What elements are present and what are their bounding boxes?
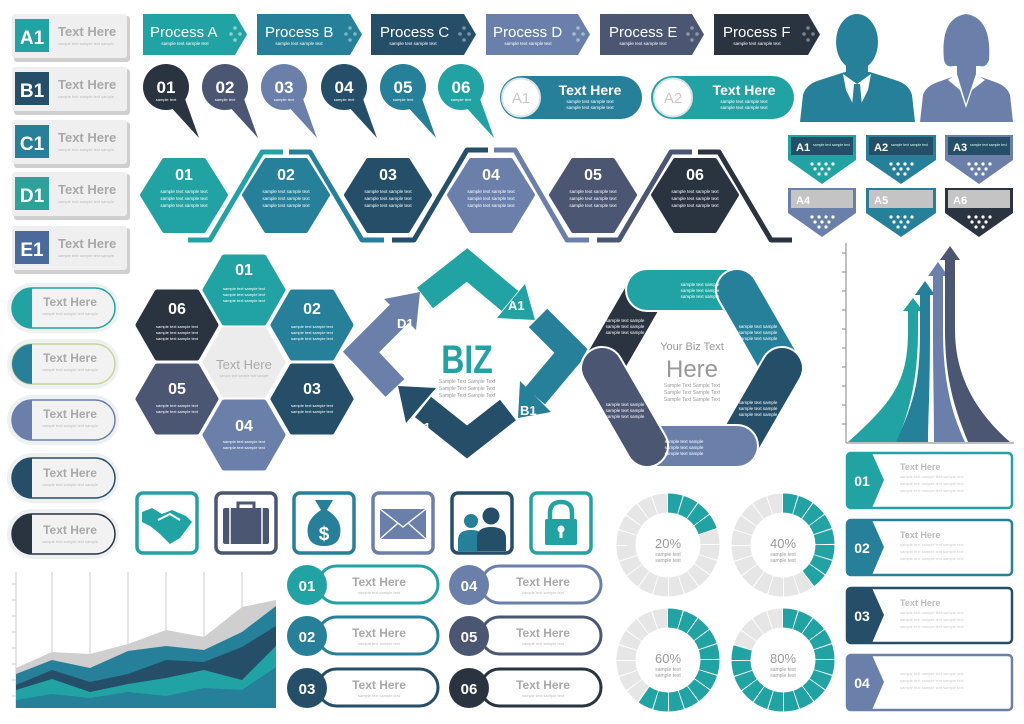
loop sample text: sample text sample <box>606 402 645 407</box>
loop center text <box>660 341 724 403</box>
loop sample text: sample text sample <box>606 330 645 335</box>
panel: A1/A2 pill tags <box>500 76 794 119</box>
tag A2: A2 <box>664 90 682 107</box>
hex 05: 05 <box>584 167 602 184</box>
pill 03: Text Here <box>352 678 406 692</box>
hex cluster 04: sample text sample text <box>223 445 266 450</box>
box 03: Text Here <box>900 598 940 608</box>
tag A1: sample text sample text <box>566 99 614 104</box>
arrow: D1: D1 <box>397 316 414 331</box>
card D1: sample text sample text sample <box>58 199 115 204</box>
pill 4: sample text sample text sample <box>42 482 99 487</box>
card B1: sample text sample text sample <box>58 94 115 99</box>
loop sample text: sample text sample <box>739 330 778 335</box>
shield A5: A5 <box>874 195 888 207</box>
icon: businessman <box>800 14 915 122</box>
box 04: sample text sample text sample text <box>900 671 964 676</box>
shield A4: A4 <box>796 195 811 207</box>
pill 02 <box>287 616 438 656</box>
donut 80% <box>741 618 825 702</box>
shield A1: sample text sample text <box>813 143 850 147</box>
box 04 <box>847 655 1012 710</box>
panel: left rounded pills <box>7 283 119 559</box>
hex cluster 02: sample text sample text <box>291 336 334 341</box>
process F <box>714 14 820 55</box>
pill 01: Text Here <box>352 575 406 589</box>
bubble 06: sample text <box>451 97 472 102</box>
hex 06: 06 <box>686 167 704 184</box>
hex cluster 05: sample text sample text <box>156 409 199 414</box>
hex 03: 03 <box>379 167 397 184</box>
pill 04: Text Here <box>516 575 570 589</box>
hex 06: sample text sample text <box>671 189 719 194</box>
hex cluster 03: 03 <box>303 381 321 398</box>
pill 02: Text Here <box>352 626 406 640</box>
hex cluster 03 <box>273 366 351 432</box>
bubble 05: 05 <box>394 78 412 97</box>
hex cluster 01: sample text sample text <box>223 286 266 291</box>
bubble 02 <box>202 64 258 138</box>
shield A2 <box>866 135 936 184</box>
box 02: Text Here <box>900 530 940 540</box>
process E: sample text sample text <box>619 41 667 46</box>
card A1: Text Here <box>58 24 116 39</box>
box 03: sample text sample text sample text <box>900 624 964 629</box>
hex cluster 04: sample text sample text <box>223 439 266 444</box>
card B1 <box>12 67 130 115</box>
process C <box>371 14 476 55</box>
pill 01: sample text sample text <box>358 590 401 595</box>
box 01: sample text sample text sample text <box>900 474 964 479</box>
loop sample text: sample text sample <box>606 318 645 323</box>
hex 03: sample text sample text <box>364 203 412 208</box>
box 03: 03 <box>854 608 870 624</box>
loop center text: Sample Text Sample Text <box>664 397 721 403</box>
pill 03: 03 <box>299 681 315 698</box>
loop sample text: sample text sample <box>739 412 778 417</box>
pill 1 <box>7 283 119 333</box>
donut 80%: 80% <box>770 651 796 666</box>
tag A2: Text Here <box>713 82 776 98</box>
loop center text: Your Biz Text <box>660 341 724 353</box>
pill 5 <box>7 509 119 559</box>
donut 20%: 20% <box>655 536 681 551</box>
shield A1: A1 <box>796 142 810 154</box>
hex 01: sample text sample text <box>160 196 208 201</box>
tag A2: sample text sample text <box>720 105 768 110</box>
bubble 05: sample text <box>393 97 414 102</box>
box 03 <box>847 588 1012 643</box>
icon: businesswoman <box>920 14 1013 122</box>
box 01 <box>847 453 1012 508</box>
card A1: sample text sample text sample <box>58 41 115 46</box>
arrow: A1 <box>425 265 535 320</box>
pill 06: sample text sample text <box>522 693 565 698</box>
shield A2: A2 <box>874 142 888 154</box>
hex cluster 04: 04 <box>235 418 253 435</box>
loop center text: Here <box>666 356 718 383</box>
donut 60%: sample text <box>655 667 681 673</box>
hex 05: sample text sample text <box>569 203 617 208</box>
loop sample text: sample text sample <box>739 324 778 329</box>
loop sample text: sample text sample <box>739 400 778 405</box>
box 01: 01 <box>854 473 870 489</box>
panel: left label cards A1-E1 <box>12 14 130 274</box>
process F: sample text sample text <box>733 41 781 46</box>
process B <box>257 14 362 55</box>
icon: briefcase <box>216 493 276 553</box>
panel: shield tags A1-A6 <box>788 135 1013 237</box>
hex cluster 06: sample text sample text <box>156 336 199 341</box>
hex cluster center: sample text sample text sample <box>219 374 269 378</box>
shield A6 <box>945 188 1013 237</box>
loop sample text: sample text sample <box>665 439 704 444</box>
panel: icon row <box>137 493 591 553</box>
box 02: sample text sample text sample text <box>900 549 964 554</box>
card E1: sample text sample text sample <box>58 253 115 258</box>
loop center text: Sample Text Sample Text <box>664 383 721 389</box>
donut 20% <box>626 503 710 587</box>
pill 5: Text Here <box>43 523 97 537</box>
text: BIZ <box>439 337 496 399</box>
box 02: 02 <box>854 540 870 556</box>
hex 06 <box>653 160 737 231</box>
process F: Process F <box>723 24 791 41</box>
arrow: C1: C1 <box>414 420 431 435</box>
box 04: 04 <box>854 675 870 691</box>
card C1: C1 <box>20 134 45 155</box>
text: BIZ: BIZ <box>441 337 493 382</box>
panel: numbered pills 01-06 <box>287 565 601 708</box>
process E: Process E <box>609 24 677 41</box>
card C1: sample text sample text sample <box>58 147 115 152</box>
hex 03: sample text sample text <box>364 196 412 201</box>
loop sample text: sample text sample <box>739 406 778 411</box>
hex 04 <box>449 160 533 231</box>
bubble 06: 06 <box>452 78 470 97</box>
loop sample text: sample text sample <box>681 282 720 287</box>
chart: rising arrows <box>842 243 1014 443</box>
bubble 06 <box>438 64 494 138</box>
process A: sample text sample text <box>161 41 209 46</box>
process D <box>486 14 590 55</box>
pill 06 <box>449 668 601 708</box>
process B: sample text sample text <box>275 41 323 46</box>
hex cluster 02: sample text sample text <box>291 330 334 335</box>
shield A3: sample text sample text <box>970 143 1007 147</box>
loop center text: Sample Text Sample Text <box>664 390 721 396</box>
box 02: sample text sample text sample text <box>900 556 964 561</box>
hex cluster 01: 01 <box>235 262 253 279</box>
donut 40%: sample text <box>770 552 796 558</box>
hex 04: sample text sample text <box>467 189 515 194</box>
bubble 02: sample text <box>215 97 236 102</box>
pill 05 <box>449 616 601 656</box>
pill 05: 05 <box>461 629 477 646</box>
bubble 05 <box>380 64 436 138</box>
pill 05: Text Here <box>516 626 570 640</box>
pill 01: 01 <box>299 578 315 595</box>
pill 4: Text Here <box>43 466 97 480</box>
hex 02 <box>244 160 328 231</box>
process E <box>600 14 704 55</box>
tag A2 <box>651 76 794 119</box>
hex cluster 06: sample text sample text <box>156 330 199 335</box>
hex cluster 01 <box>205 257 283 323</box>
hex cluster 02: sample text sample text <box>291 324 334 329</box>
donut 80%: sample text <box>770 673 796 679</box>
hex 01: 01 <box>175 167 193 184</box>
box 01: Text Here <box>900 462 940 472</box>
hex cluster center: Text Here <box>216 357 272 372</box>
pill 1: Text Here <box>43 295 97 309</box>
donut 80%: sample text <box>770 667 796 673</box>
loop sample text: sample text sample <box>606 408 645 413</box>
pill 4 <box>7 453 119 503</box>
card D1: D1 <box>20 186 45 207</box>
pill 04 <box>449 565 601 605</box>
bubble 01 <box>143 64 199 138</box>
arrow: B1: B1 <box>520 403 537 418</box>
box 03: sample text sample text sample text <box>900 610 964 615</box>
panel: hexagon cluster <box>138 257 351 468</box>
hex 04: sample text sample text <box>467 203 515 208</box>
process D: sample text sample text <box>504 41 552 46</box>
shield A4 <box>788 188 856 237</box>
donut 60%: sample text <box>655 673 681 679</box>
pill 01 <box>287 565 438 605</box>
panel: donut charts <box>626 503 825 702</box>
arrow: B1 <box>518 318 572 418</box>
card C1: Text Here <box>58 130 116 145</box>
donut 40% <box>741 503 825 587</box>
tag A1: sample text sample text <box>566 105 614 110</box>
panel: speech bubbles 01-06 <box>143 64 494 138</box>
hex cluster 02: 02 <box>303 301 321 318</box>
donut 20%: sample text <box>655 558 681 564</box>
shield A2: sample text sample text <box>891 143 928 147</box>
card E1: E1 <box>20 240 44 261</box>
pill 06: 06 <box>461 681 477 698</box>
bubble 04 <box>321 64 377 138</box>
hex 06: sample text sample text <box>671 196 719 201</box>
card C1 <box>12 120 130 168</box>
hex 05 <box>551 160 635 231</box>
panel: hexagonal loop <box>602 282 782 456</box>
card E1: Text Here <box>58 236 116 251</box>
hex 05: sample text sample text <box>569 196 617 201</box>
icon: envelope <box>373 493 433 553</box>
card B1: B1 <box>20 81 45 102</box>
panel: BIZ cycle arrows <box>361 265 572 442</box>
pill 06: Text Here <box>516 678 570 692</box>
bubble 03: 03 <box>275 78 293 97</box>
box 02 <box>847 520 1012 575</box>
pill 02: 02 <box>299 629 315 646</box>
loop sample text: sample text sample <box>665 451 704 456</box>
pill 3 <box>7 395 119 445</box>
hex 05: sample text sample text <box>569 189 617 194</box>
arrow: A1: A1 <box>508 298 525 313</box>
bubble 03 <box>261 64 317 138</box>
hex cluster 06: sample text sample text <box>156 324 199 329</box>
loop sample text: sample text sample <box>681 288 720 293</box>
bubble 04: sample text <box>334 97 355 102</box>
pill 3: Text Here <box>43 407 97 421</box>
process B: Process B <box>265 24 333 41</box>
card A1 <box>12 14 130 62</box>
tag A1: A1 <box>512 90 530 107</box>
pill 3: sample text sample text sample <box>42 423 99 428</box>
box 02: sample text sample text sample text <box>900 542 964 547</box>
hex 01: sample text sample text <box>160 189 208 194</box>
text: BIZ: Sample Text Sample Text <box>439 386 496 392</box>
hex cluster 06: 06 <box>168 301 186 318</box>
box 04: sample text sample text sample text <box>900 685 964 690</box>
icon: people <box>452 493 512 553</box>
loop sample text: sample text sample <box>606 324 645 329</box>
pill 05: sample text sample text <box>522 641 565 646</box>
loop sample text: sample text sample <box>606 414 645 419</box>
hex 02: sample text sample text <box>262 189 310 194</box>
process C: Process C <box>380 24 449 41</box>
hex cluster 05: 05 <box>168 381 186 398</box>
tag A2: sample text sample text <box>720 99 768 104</box>
icon: money bag <box>294 493 354 553</box>
hex cluster 04 <box>205 402 283 468</box>
hex cluster 05 <box>138 366 216 432</box>
card B1: Text Here <box>58 77 116 92</box>
hex 06: sample text sample text <box>671 203 719 208</box>
hex cluster 05: sample text sample text <box>156 403 199 408</box>
panel: people silhouettes <box>800 14 1013 122</box>
box 03: sample text sample text sample text <box>900 617 964 622</box>
process D: Process D <box>493 24 562 41</box>
panel: process arrows A-F <box>143 14 820 55</box>
icon: padlock <box>531 493 591 553</box>
loop sample text: sample text sample <box>681 294 720 299</box>
pill 04: sample text sample text <box>522 590 565 595</box>
hex 04: sample text sample text <box>467 196 515 201</box>
arrow: D1 <box>361 292 420 388</box>
process A <box>143 14 247 55</box>
pill 2: Text Here <box>43 351 97 365</box>
loop sample text: sample text sample <box>665 445 704 450</box>
hex 02: sample text sample text <box>262 203 310 208</box>
arrow: C1 <box>398 386 508 442</box>
shield A3: A3 <box>953 142 967 154</box>
hex 01: sample text sample text <box>160 203 208 208</box>
donut 40%: sample text <box>770 558 796 564</box>
hex cluster 01: sample text sample text <box>223 298 266 303</box>
hex cluster center <box>205 329 283 395</box>
box 04: sample text sample text sample text <box>900 678 964 683</box>
donut 20%: sample text <box>655 552 681 558</box>
hex cluster 01: sample text sample text <box>223 292 266 297</box>
icon: money bag: $ <box>319 524 330 545</box>
panel: numbered text boxes 01-04 <box>847 453 1012 710</box>
pill 2: sample text sample text sample <box>42 367 99 372</box>
shield A6: A6 <box>953 195 967 207</box>
card D1 <box>12 172 130 220</box>
bubble 02: 02 <box>216 78 234 97</box>
donut 60% <box>626 618 710 702</box>
box 01: sample text sample text sample text <box>900 488 964 493</box>
pill 03: sample text sample text <box>358 693 401 698</box>
pill 2 <box>7 339 119 389</box>
process C: sample text sample text <box>389 41 437 46</box>
hex 03 <box>346 160 430 231</box>
hex cluster 03: sample text sample text <box>291 409 334 414</box>
text: BIZ: Sample Text Sample Text <box>439 393 496 399</box>
process A: Process A <box>150 24 218 41</box>
shield A1 <box>788 135 856 184</box>
loop sample text <box>606 282 778 456</box>
shield A5 <box>866 188 936 237</box>
pill 1: sample text sample text sample <box>42 311 99 316</box>
hex 03: sample text sample text <box>364 189 412 194</box>
hex 02: sample text sample text <box>262 196 310 201</box>
panel: hexagon process chain <box>142 150 792 240</box>
pill 02: sample text sample text <box>358 641 401 646</box>
bubble 04: 04 <box>335 78 354 97</box>
hex 01 <box>142 160 226 231</box>
hex cluster 03: sample text sample text <box>291 403 334 408</box>
bubble 01: 01 <box>157 78 175 97</box>
donut 60%: 60% <box>655 651 681 666</box>
hex 04: 04 <box>482 167 500 184</box>
donut 40%: 40% <box>770 536 796 551</box>
hex cluster 06 <box>138 292 216 358</box>
bubble 01: sample text <box>156 97 177 102</box>
card E1 <box>12 226 130 274</box>
box 01: sample text sample text sample text <box>900 481 964 486</box>
bubble 03: sample text <box>274 97 295 102</box>
hex cluster 02 <box>273 292 351 358</box>
tag A1 <box>500 76 642 119</box>
pill 03 <box>287 668 438 708</box>
text: BIZ: Sample Text Sample Text <box>439 379 496 385</box>
shield A3 <box>945 135 1013 184</box>
chart: stacked area chart <box>12 572 276 708</box>
card A1: A1 <box>20 28 45 49</box>
hex 02: 02 <box>277 167 295 184</box>
icon: handshake <box>137 493 197 553</box>
pill 5: sample text sample text sample <box>42 539 99 544</box>
card D1: Text Here <box>58 182 116 197</box>
tag A1: Text Here <box>559 82 622 98</box>
loop sample text: sample text sample <box>739 336 778 341</box>
pill 04: 04 <box>461 578 478 595</box>
